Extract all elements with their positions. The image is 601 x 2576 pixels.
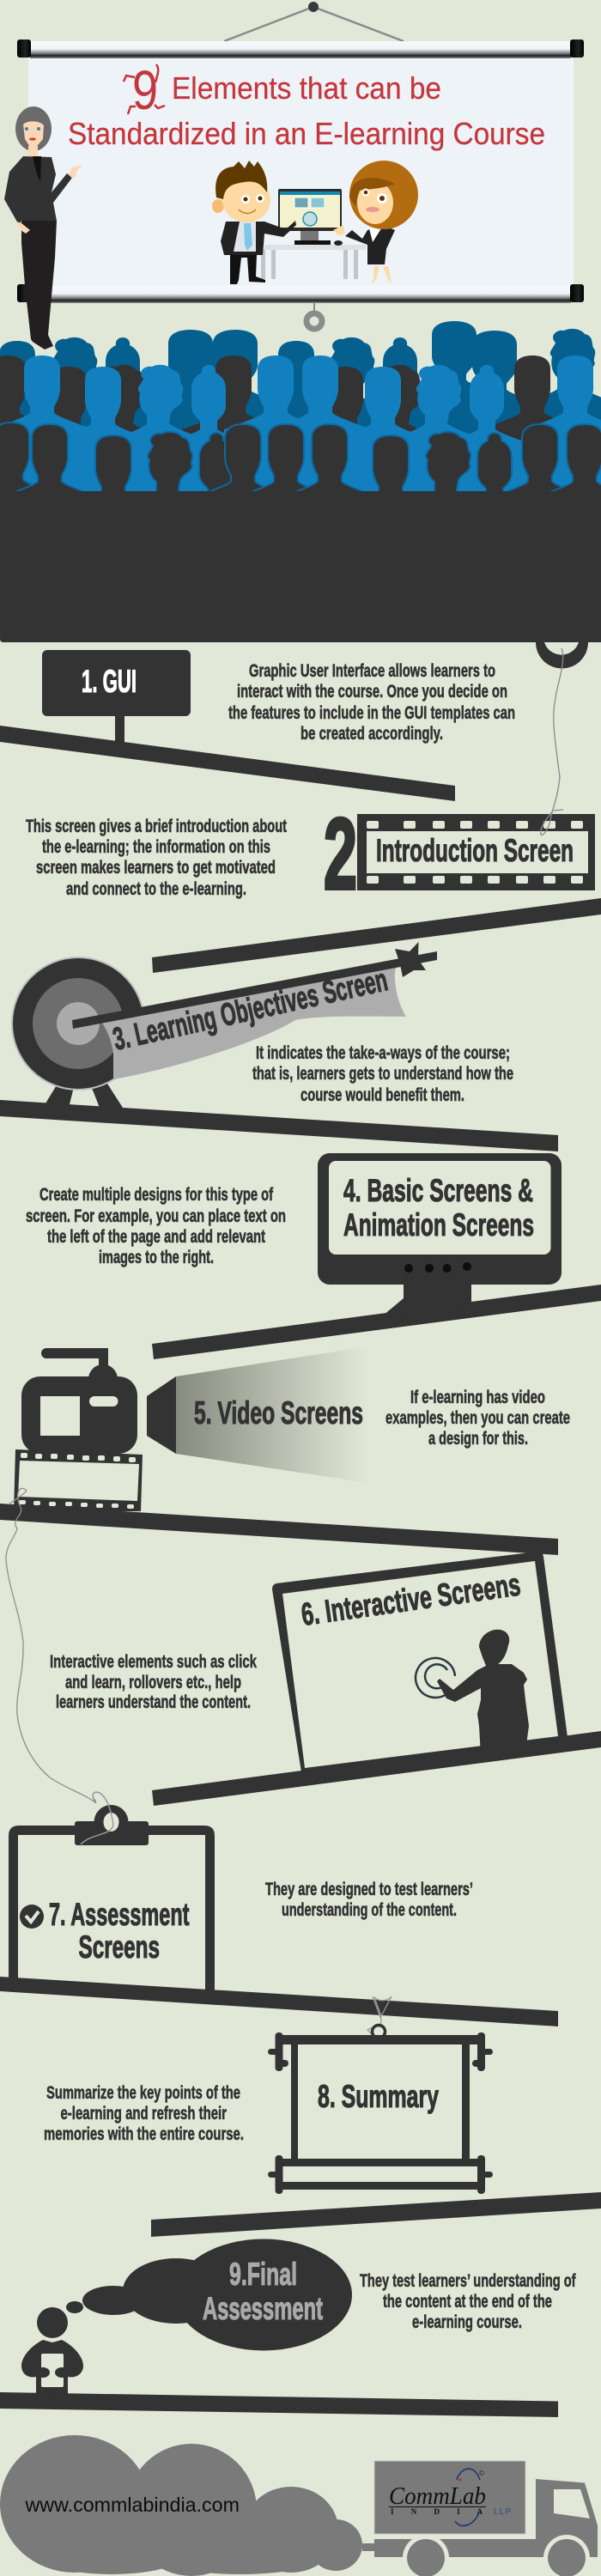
title bbox=[68, 59, 545, 151]
description 7: understanding of the content. bbox=[282, 1900, 457, 1920]
description 4: screen. For example, you can place text on bbox=[26, 1206, 286, 1226]
arrow banner bbox=[101, 965, 406, 1079]
pull ring bbox=[307, 302, 322, 329]
footer truck and exhaust cloud bbox=[0, 2435, 598, 2576]
touch circles bbox=[416, 1658, 455, 1698]
description 8: memories with the entire course. bbox=[44, 2124, 244, 2144]
description 3: course would benefit them. bbox=[300, 1085, 464, 1105]
description 6: and learn, rollovers etc., help bbox=[65, 1673, 241, 1692]
silhouette person bbox=[437, 1630, 529, 1756]
sign heading bbox=[42, 650, 191, 716]
section 1: GUI bbox=[0, 650, 515, 801]
screen surface bbox=[28, 57, 574, 287]
exhaust cloud bbox=[0, 2435, 376, 2576]
description 2: This screen gives a brief introduction about bbox=[26, 817, 287, 836]
description 8: Summarize the key points of the bbox=[46, 2083, 240, 2103]
check icon bbox=[20, 1905, 44, 1929]
big number 2: 2 bbox=[324, 798, 357, 911]
presenter hands bbox=[16, 165, 82, 234]
arrow bbox=[72, 942, 437, 1029]
section 7: assessment screens bbox=[0, 1792, 558, 2026]
sign post bbox=[115, 713, 124, 750]
heading 9 bbox=[203, 2257, 323, 2326]
presenter bbox=[4, 106, 82, 349]
projector screen bbox=[17, 2, 584, 329]
section 9: final assessment bbox=[0, 2239, 576, 2417]
section 2: introduction screen bbox=[26, 648, 601, 973]
top roller bbox=[17, 39, 584, 58]
presenter jacket bbox=[4, 156, 72, 225]
film reel bbox=[14, 1449, 143, 1511]
description 7 bbox=[265, 1880, 473, 1920]
clipboard bbox=[9, 1805, 215, 1996]
hanging string 2 bbox=[6, 1488, 113, 1844]
target bbox=[12, 957, 144, 1108]
shelf 1 bbox=[0, 726, 455, 801]
CommLab logo: CommLab bbox=[389, 2483, 486, 2510]
website url: www.commlabindia.com bbox=[24, 2494, 240, 2516]
second row blue bbox=[0, 355, 601, 543]
heading 4 bbox=[343, 1173, 534, 1242]
section 5: video screens bbox=[0, 1346, 570, 1555]
illustration: two colleagues at a computer bbox=[212, 161, 418, 284]
heading 9: Assessment bbox=[203, 2291, 323, 2326]
audience back row bbox=[0, 321, 601, 515]
second row dark bbox=[0, 355, 586, 538]
description 6 bbox=[50, 1652, 257, 1712]
shelf 2 bbox=[152, 898, 601, 973]
shelf 6 bbox=[152, 1731, 601, 1806]
description 2: and connect to the e-learning. bbox=[66, 879, 246, 899]
hanging string 1 bbox=[541, 648, 563, 835]
description 5: If e-learning has video bbox=[410, 1388, 545, 1407]
section 8: summary bbox=[44, 1996, 601, 2237]
description 6: learners understand the content. bbox=[56, 1692, 251, 1712]
monitor frame bbox=[318, 1153, 562, 1315]
description 4 bbox=[26, 1185, 286, 1267]
scroll string bbox=[367, 1996, 392, 2037]
presenter legs and shoes bbox=[21, 221, 57, 349]
description 1 bbox=[228, 661, 515, 744]
projector light bbox=[176, 1346, 368, 1483]
shelf 3 bbox=[0, 1100, 558, 1151]
CommLab logo: LLP bbox=[494, 2507, 511, 2517]
description 4: Create multiple designs for this type of bbox=[39, 1185, 274, 1205]
description 8: e-learning and refresh their bbox=[60, 2104, 227, 2123]
heading 7: 7. Assessment bbox=[49, 1897, 189, 1932]
shelf 5 bbox=[0, 1504, 558, 1555]
shelf 9 bbox=[0, 2392, 558, 2417]
description 1: be created accordingly. bbox=[300, 724, 443, 744]
man bbox=[212, 161, 296, 284]
clip string bbox=[81, 1792, 113, 1844]
presenter head bbox=[15, 106, 52, 182]
description 5 bbox=[385, 1388, 570, 1449]
description 3 bbox=[252, 1043, 513, 1105]
section 6: interactive screens bbox=[50, 1552, 601, 1806]
thinking person bbox=[21, 2307, 83, 2400]
thought bubble bbox=[66, 2239, 352, 2351]
description 4: the left of the page and add relevant bbox=[47, 1227, 265, 1247]
interactive board bbox=[272, 1552, 568, 1782]
hanging ring bbox=[536, 642, 588, 668]
title: Elements that can be bbox=[172, 70, 441, 106]
title: Standardized in an E-learning Course bbox=[68, 116, 545, 151]
description 5: a design for this. bbox=[428, 1429, 528, 1449]
screen hanger bbox=[224, 2, 404, 41]
audience base block bbox=[0, 491, 601, 642]
section 3: learning objectives bbox=[0, 942, 558, 1151]
description 2: screen makes learners to get motivated bbox=[36, 858, 276, 878]
shelf 7 bbox=[0, 1977, 558, 2026]
heading 5: 5. Video Screens bbox=[194, 1395, 363, 1431]
decorated number nine: 9 bbox=[132, 59, 158, 121]
CommLab logo: © bbox=[479, 2470, 484, 2477]
table bbox=[261, 245, 366, 279]
heading 8: 8. Summary bbox=[318, 2079, 439, 2114]
shelf 8 bbox=[151, 2192, 601, 2237]
shelf 4 bbox=[152, 1285, 601, 1359]
CommLab logo: I N D I A bbox=[391, 2507, 483, 2516]
description 8 bbox=[44, 2083, 244, 2144]
bottom roller bbox=[17, 284, 584, 303]
monitor bbox=[278, 189, 343, 246]
audience front rows bbox=[0, 355, 601, 642]
description 9: e-learning course. bbox=[412, 2312, 522, 2332]
video camera bbox=[21, 1348, 176, 1454]
heading 7: Screens bbox=[79, 1929, 160, 1965]
description 9 bbox=[360, 2271, 576, 2332]
film strip bbox=[357, 814, 595, 890]
front row dark bbox=[0, 422, 601, 611]
heading 9: 9.Final bbox=[229, 2257, 297, 2292]
description 2: the e-learning; the information on this bbox=[42, 837, 270, 857]
scroll screen bbox=[268, 2025, 493, 2194]
sign heading: 1. GUI bbox=[82, 664, 137, 699]
woman colleague bbox=[333, 161, 418, 284]
description 2 bbox=[26, 817, 287, 899]
heading 7 bbox=[49, 1897, 189, 1965]
description 4: images to the right. bbox=[99, 1248, 214, 1267]
description 1: Graphic User Interface allows learners to bbox=[249, 661, 495, 681]
section 4: basic screens bbox=[26, 1153, 601, 1359]
truck bbox=[374, 2461, 598, 2576]
description 6: Interactive elements such as click bbox=[50, 1652, 257, 1672]
CommLab logo bbox=[389, 2469, 511, 2525]
heading 3: 3. Learning Objectives Screen bbox=[110, 962, 391, 1057]
description 7: They are designed to test learners’ bbox=[265, 1880, 473, 1899]
